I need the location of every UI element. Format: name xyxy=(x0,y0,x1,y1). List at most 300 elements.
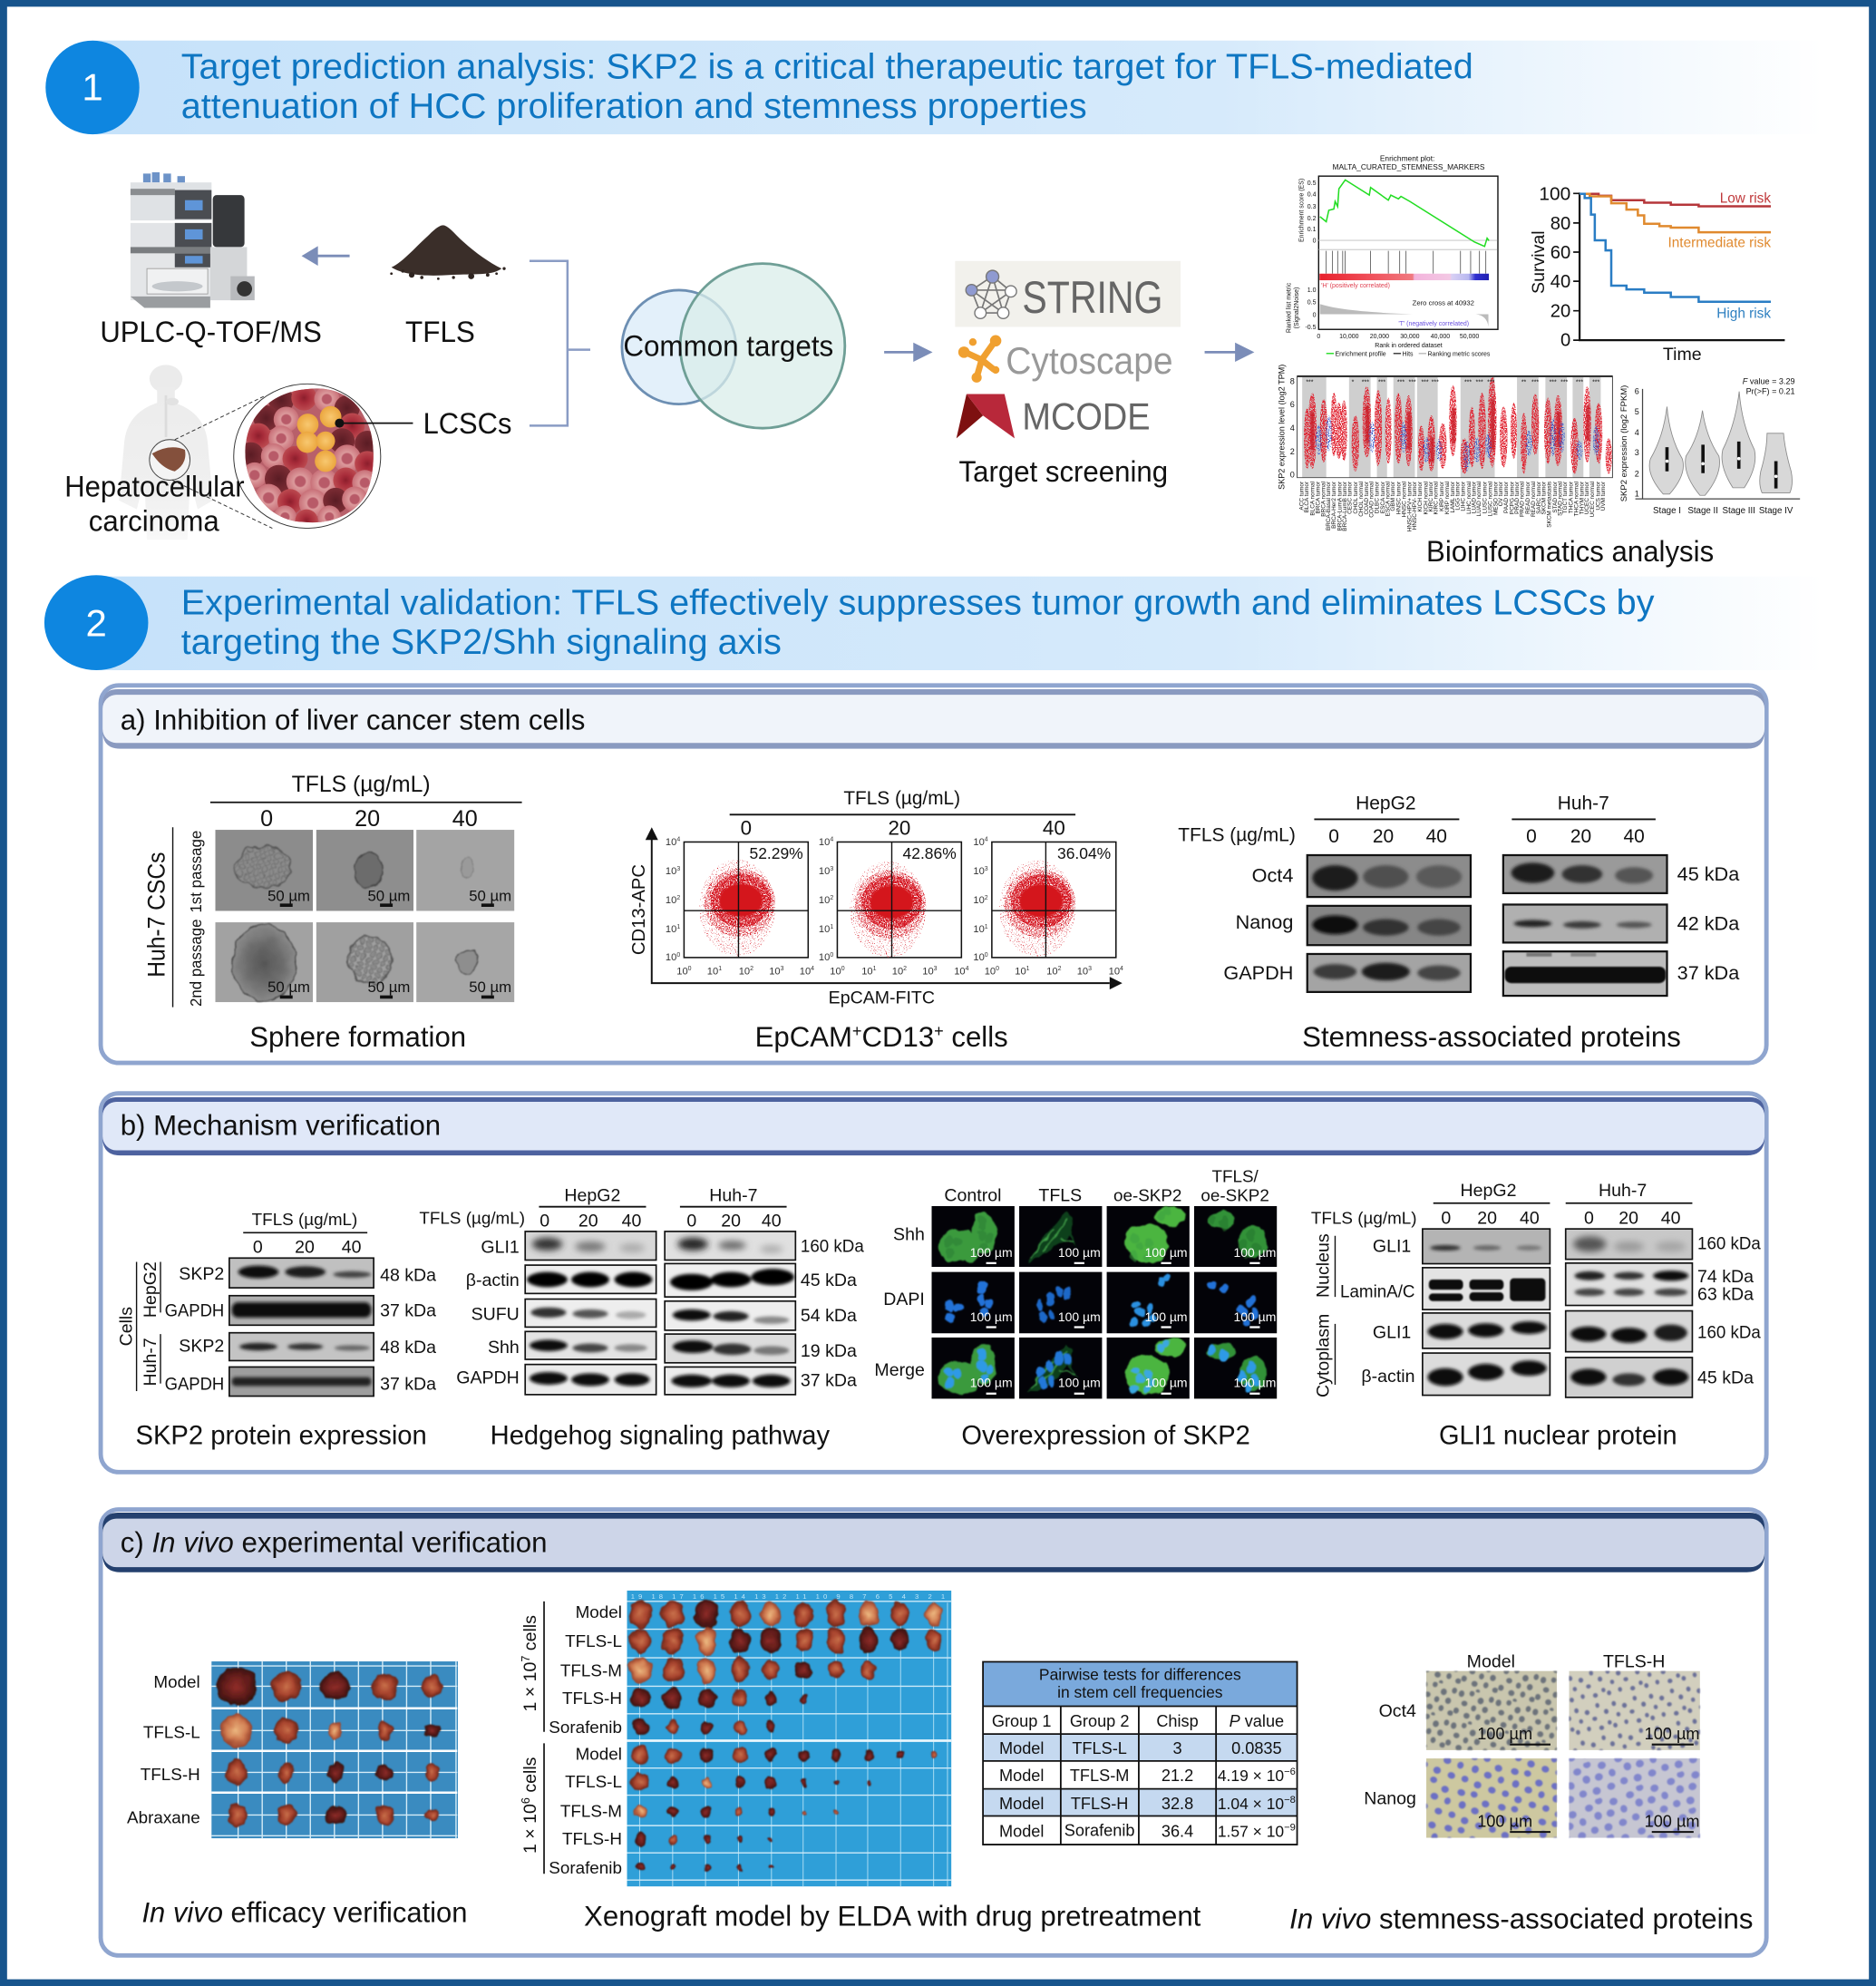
bracket connector xyxy=(530,261,590,425)
chart: TIMER SKP2 pan-cancer expression box plot: SKCM tumor xyxy=(1541,481,1547,515)
flow cytometry dot plots: 0 xyxy=(676,952,680,959)
table: pairwise tests for differences in stem cell frequencies: Model xyxy=(999,1767,1044,1785)
chart: GSEA enrichment plot: (Signal2Noise) xyxy=(1294,287,1300,328)
immunofluorescence micrographs: overexpression of SKP2: oe-SKP2 xyxy=(1200,1185,1269,1204)
immunofluorescence micrographs: overexpression of SKP2: 100 µm xyxy=(1145,1376,1188,1390)
table: pairwise tests for differences in stem cell frequencies: TFLS-H xyxy=(1071,1795,1128,1813)
flow cytometry dot plots: 3 xyxy=(781,966,784,972)
icon: TFLS powder pile xyxy=(390,225,506,280)
chart: TIMER SKP2 pan-cancer expression box plot: KIRC tumor xyxy=(1428,481,1434,511)
chart: GSEA enrichment plot: Zero cross at 40932 xyxy=(1413,299,1474,307)
chart: TIMER SKP2 pan-cancer expression box plot: *** xyxy=(1592,379,1599,385)
chart: TIMER SKP2 pan-cancer expression box plot: GBM tumor xyxy=(1390,481,1396,511)
chart: TIMER SKP2 pan-cancer expression box plot: SARC tumor xyxy=(1536,481,1542,514)
immunofluorescence micrographs: overexpression of SKP2: 100 µm xyxy=(970,1376,1013,1390)
table: pairwise tests for differences in stem cell frequencies: Model xyxy=(999,1795,1044,1813)
flow cytometry dot plots: 10 xyxy=(666,924,676,935)
chart: TIMER SKP2 pan-cancer expression box plot: *** xyxy=(1476,379,1483,385)
flow cytometry dot plots: 4 xyxy=(1120,966,1123,972)
chart: Kaplan-Meier survival curves: 60 xyxy=(1550,243,1570,263)
western blots: GLI1 nuclear protein: 160 kDa xyxy=(1697,1233,1761,1253)
chart: TIMER SKP2 pan-cancer expression box plot: CHOL tumor xyxy=(1353,481,1359,514)
logo: Cytoscape: Cytoscape xyxy=(1006,339,1173,382)
panel c header: c) In vivo experimental verification xyxy=(121,1526,548,1558)
flow cytometry dot plots: 10 xyxy=(985,966,996,977)
flow cytometry dot plots: 10 xyxy=(973,924,985,935)
chart: violin plot by tumor stage: 2 xyxy=(1635,469,1639,478)
table: pairwise tests for differences in stem cell frequencies: 3 xyxy=(1172,1739,1182,1757)
photo: xenograft tumors limiting dilution: TFLS-M xyxy=(560,1801,622,1820)
flow cytometry dot plots: TFLS (µg/mL) xyxy=(843,788,960,809)
western blots: stemness proteins: HepG2 xyxy=(1356,793,1416,814)
chart: TIMER SKP2 pan-cancer expression box plot: MESO tumor xyxy=(1492,481,1499,515)
chart: TIMER SKP2 pan-cancer expression box plot: PAAD tumor xyxy=(1503,481,1510,513)
flow cytometry dot plots: 2 xyxy=(985,895,988,901)
chart: TIMER SKP2 pan-cancer expression box plot: HNSC tumor xyxy=(1395,481,1402,514)
label: UPLC-Q-TOF/MS: UPLC-Q-TOF/MS xyxy=(100,316,322,348)
western blots: Hedgehog signaling pathway: 19 kDa xyxy=(801,1341,857,1361)
flow cytometry dot plots: 10 xyxy=(1109,966,1120,977)
chart: Kaplan-Meier survival curves: 40 xyxy=(1550,272,1570,292)
western blots: SKP2 protein expression xyxy=(116,1210,436,1397)
immunofluorescence micrographs: overexpression of SKP2: 100 µm xyxy=(1145,1309,1188,1324)
panel c: in vivo experimental verification xyxy=(101,1510,1766,1955)
chart: TIMER SKP2 pan-cancer expression box plot: UCEC normal xyxy=(1589,482,1596,517)
sphere formation micrographs: TFLS (µg/mL) xyxy=(292,773,431,797)
sphere formation micrographs: 50 µm xyxy=(469,978,511,996)
sphere formation micrographs: 50 µm xyxy=(267,887,310,904)
western blots: GLI1 nuclear protein: 63 kDa xyxy=(1697,1284,1754,1304)
chart: GSEA enrichment plot: 'T' (negatively correlated) xyxy=(1398,321,1469,327)
western blots: stemness proteins: 0 xyxy=(1328,826,1339,847)
chart: GSEA enrichment plot: 0.5 xyxy=(1307,299,1317,306)
flow cytometry dot plots: 10 xyxy=(1046,966,1058,977)
western blots: SKP2 protein expression: 20 xyxy=(295,1238,315,1258)
western blots: stemness proteins: 45 kDa xyxy=(1677,862,1740,885)
arrow: venn to target screening xyxy=(884,345,929,360)
western blots: stemness proteins: 20 xyxy=(1373,826,1394,847)
chart: TIMER SKP2 pan-cancer expression box plot: LAML tumor xyxy=(1450,481,1456,513)
sphere formation micrographs xyxy=(143,773,522,1008)
western blots: GLI1 nuclear protein: GLI1 xyxy=(1373,1322,1411,1342)
western blots: SKP2 protein expression: 0 xyxy=(253,1238,263,1258)
flow cytometry dot plots: 10 xyxy=(769,966,781,977)
chart: violin plot by tumor stage: Stage IV xyxy=(1759,506,1793,516)
chart: TIMER SKP2 pan-cancer expression box plot xyxy=(1278,365,1612,531)
chart: TIMER SKP2 pan-cancer expression box plot: ESCA tumor xyxy=(1380,481,1386,513)
chart: TIMER SKP2 pan-cancer expression box plot: ** xyxy=(1521,379,1527,385)
photo: xenograft tumors limiting dilution: 6 xyxy=(520,1797,532,1804)
chart: TIMER SKP2 pan-cancer expression box plot: 6 xyxy=(1290,400,1295,409)
chart: TIMER SKP2 pan-cancer expression box plot: ESCA normal xyxy=(1385,482,1392,516)
photo: excised tumors by treatment group: TFLS-H xyxy=(141,1765,200,1784)
immunofluorescence micrographs: overexpression of SKP2: 100 µm xyxy=(1145,1245,1188,1260)
photo: excised tumors by treatment group: TFLS-L xyxy=(143,1723,200,1742)
western blots: Hedgehog signaling pathway: 160 kDa xyxy=(801,1236,864,1256)
caption: EpCAM+CD13+ cells: EpCAM xyxy=(755,1021,852,1053)
photo: xenograft tumors limiting dilution: cells xyxy=(520,1757,540,1797)
immunofluorescence micrographs: overexpression of SKP2: Shh xyxy=(893,1225,925,1245)
chart: Kaplan-Meier survival curves: 80 xyxy=(1550,214,1570,234)
sphere formation micrographs: 1st passage xyxy=(187,831,205,913)
section 2 header xyxy=(44,575,1824,670)
western blots: SKP2 protein expression: TFLS (µg/mL) xyxy=(252,1210,357,1229)
chart: GSEA enrichment plot: 0.5 xyxy=(1307,180,1317,187)
photo: xenograft tumors limiting dilution: 19 18 17 16 15 14 13 12 11 10 9 8 7 6 5 4 3 2 1 xyxy=(631,1592,945,1601)
western blots: SKP2 protein expression: HepG2 xyxy=(141,1261,160,1318)
western blots: Hedgehog signaling pathway: Shh xyxy=(488,1338,520,1358)
chart: TIMER SKP2 pan-cancer expression box plot: BRCA normal xyxy=(1320,482,1327,517)
arrow: TFLS to UPLC xyxy=(304,248,350,264)
flow cytometry dot plots: 3 xyxy=(830,866,833,872)
icon: tumor cell cluster with cancer stem cells xyxy=(234,384,381,532)
flow cytometry dot plots: 10 xyxy=(973,866,985,877)
chart: TIMER SKP2 pan-cancer expression box plot: KICH normal xyxy=(1423,482,1429,515)
western blots: stemness proteins: 37 kDa xyxy=(1677,961,1740,984)
chart: TIMER SKP2 pan-cancer expression box plot: LIHC normal xyxy=(1466,482,1473,514)
chart: violin plot by tumor stage: 5 xyxy=(1635,407,1639,416)
caption: In vivo stemness-associated proteins: In vivo stemness-associated proteins xyxy=(1289,1903,1753,1934)
western blots: stemness proteins: 20 xyxy=(1570,826,1591,847)
section 1 header: attenuation of HCC proliferation and stemness properties xyxy=(181,87,1087,126)
flow cytometry dot plots: 10 xyxy=(922,966,934,977)
immunofluorescence micrographs: overexpression of SKP2: 100 µm xyxy=(1233,1309,1276,1324)
immunohistochemistry micrographs: Nanog xyxy=(1364,1788,1416,1808)
sphere formation micrographs: 2nd passage xyxy=(187,920,205,1007)
flow cytometry dot plots: 2 xyxy=(676,895,680,901)
western blots: GLI1 nuclear protein: 20 xyxy=(1477,1209,1497,1229)
western blots: Hedgehog signaling pathway: TFLS (µg/mL) xyxy=(419,1209,525,1228)
western blots: stemness proteins: Oct4 xyxy=(1252,863,1293,886)
western blots: GLI1 nuclear protein: 0 xyxy=(1584,1209,1594,1229)
flow cytometry dot plots xyxy=(629,788,1123,1008)
western blots: Hedgehog signaling pathway: HepG2 xyxy=(564,1185,620,1205)
callout: LCSCs pointer and label xyxy=(335,407,511,440)
western blots: GLI1 nuclear protein: 74 kDa xyxy=(1697,1267,1754,1287)
chart: TIMER SKP2 pan-cancer expression box plot: READ normal xyxy=(1531,482,1537,517)
chart: TIMER SKP2 pan-cancer expression box plot: *** xyxy=(1397,379,1405,385)
caption: Stemness-associated proteins: Stemness-associated proteins xyxy=(1302,1021,1681,1053)
flow cytometry dot plots: 52.29% xyxy=(750,844,803,862)
flow cytometry dot plots: 0 xyxy=(841,966,845,972)
panel c header xyxy=(102,1513,1764,1572)
immunohistochemistry micrographs: 100 µm xyxy=(1645,1813,1700,1831)
sphere formation micrographs: 40 xyxy=(452,806,478,832)
western blots: GLI1 nuclear protein: Cytoplasm xyxy=(1313,1314,1333,1397)
chart: GSEA enrichment plot: 20,000 xyxy=(1370,334,1389,340)
western blots: GLI1 nuclear protein: 160 kDa xyxy=(1697,1322,1761,1342)
photo: xenograft tumors limiting dilution: TFLS-L xyxy=(565,1631,622,1650)
chart: TIMER SKP2 pan-cancer expression box plot: *** xyxy=(1306,379,1314,385)
table: pairwise tests for differences in stem cell frequencies: 0.0835 xyxy=(1231,1739,1282,1757)
chart: TIMER SKP2 pan-cancer expression box plot: KICH tumor xyxy=(1417,481,1424,511)
immunofluorescence micrographs: overexpression of SKP2: 100 µm xyxy=(1233,1245,1276,1260)
sphere formation micrographs: 50 µm xyxy=(469,887,511,904)
chart: GSEA enrichment plot: 40,000 xyxy=(1431,334,1450,340)
chart: violin plot by tumor stage: Pr(>F) = 0.21 xyxy=(1746,386,1795,395)
table: pairwise tests for differences in stem cell frequencies: TFLS-M xyxy=(1070,1767,1129,1785)
icon: UPLC-Q-TOF/MS instrument xyxy=(131,172,255,307)
western blots: Hedgehog signaling pathway: GAPDH xyxy=(456,1368,520,1388)
immunofluorescence micrographs: overexpression of SKP2: 100 µm xyxy=(970,1245,1013,1260)
western blots: Hedgehog signaling pathway: 45 kDa xyxy=(801,1270,857,1290)
table: pairwise tests for differences in stem cell frequencies: TFLS-L xyxy=(1072,1739,1127,1757)
panel a header xyxy=(102,689,1764,749)
section 1 header xyxy=(45,41,1824,134)
western blots: SKP2 protein expression: 48 kDa xyxy=(380,1338,436,1358)
callout: LCSCs pointer and label: LCSCs xyxy=(423,407,511,440)
venn diagram: common targets: Common targets xyxy=(623,330,833,363)
flow cytometry dot plots: 10 xyxy=(892,966,903,977)
western blots: Hedgehog signaling pathway: Huh-7 xyxy=(709,1185,758,1205)
chart: TIMER SKP2 pan-cancer expression box plot: LGG tumor xyxy=(1454,481,1461,511)
photo: excised tumors by treatment group xyxy=(127,1661,458,1838)
chart: Kaplan-Meier survival curves: Low risk xyxy=(1720,191,1771,207)
flow cytometry dot plots: 1 xyxy=(718,966,722,972)
chart: TIMER SKP2 pan-cancer expression box plot: 4 xyxy=(1290,423,1295,433)
immunofluorescence micrographs: overexpression of SKP2: Merge xyxy=(874,1360,925,1380)
flow cytometry dot plots: 10 xyxy=(800,966,811,977)
flow cytometry dot plots: 10 xyxy=(739,966,750,977)
western blots: Hedgehog signaling pathway: 0 xyxy=(539,1211,549,1231)
chart: TIMER SKP2 pan-cancer expression box plot: BLCA tumor xyxy=(1304,481,1310,512)
panel b: mechanism verification xyxy=(101,1094,1766,1472)
chart: GSEA enrichment plot: 0 xyxy=(1313,312,1317,318)
caption: GLI1 nuclear protein: GLI1 nuclear protein xyxy=(1439,1421,1677,1451)
section 1 header: 1 xyxy=(82,65,103,108)
table: pairwise tests for differences in stem cell frequencies: in stem cell frequencies xyxy=(1057,1683,1223,1701)
chart: TIMER SKP2 pan-cancer expression box plot: DLBC tumor xyxy=(1375,481,1381,513)
flow cytometry dot plots: 1 xyxy=(985,924,988,930)
caption: EpCAM+CD13+ cells: CD13 xyxy=(862,1021,934,1053)
caption: EpCAM+CD13+ cells: + xyxy=(852,1022,862,1040)
chart: Kaplan-Meier survival curves: Time xyxy=(1663,345,1702,365)
chart: GSEA enrichment plot: MALTA_CURATED_STEMNESS_MARKERS xyxy=(1332,162,1485,171)
chart: GSEA enrichment plot: -0.5 xyxy=(1305,325,1317,331)
western blots: GLI1 nuclear protein: 40 xyxy=(1520,1209,1540,1229)
chart: TIMER SKP2 pan-cancer expression box plot: PCPG tumor xyxy=(1509,481,1515,514)
chart: TIMER SKP2 pan-cancer expression box plot: *** xyxy=(1378,379,1385,385)
chart: TIMER SKP2 pan-cancer expression box plot: SKP2 expression level (log2 TPM) xyxy=(1278,365,1287,490)
chart: violin plot by tumor stage: 3 xyxy=(1635,448,1639,457)
chart: TIMER SKP2 pan-cancer expression box plot: 0 xyxy=(1290,471,1295,480)
western blots: SKP2 protein expression: Huh-7 xyxy=(141,1338,160,1386)
flow cytometry dot plots: 4 xyxy=(830,837,833,843)
chart: GSEA enrichment plot: 'H' (positively correlated) xyxy=(1321,283,1390,289)
chart: TIMER SKP2 pan-cancer expression box plot: BRCA-LumB tumor xyxy=(1342,481,1348,531)
chart: Kaplan-Meier survival curves: 100 xyxy=(1539,185,1570,205)
chart: TIMER SKP2 pan-cancer expression box plot: BRCA-Her2 tumor xyxy=(1331,481,1337,529)
western blots: stemness proteins: Nanog xyxy=(1236,910,1293,933)
immunofluorescence micrographs: overexpression of SKP2: 100 µm xyxy=(1058,1309,1101,1324)
chart: TIMER SKP2 pan-cancer expression box plot: COAD normal xyxy=(1368,482,1375,518)
chart: GSEA enrichment plot: Rank in ordered dataset xyxy=(1375,343,1443,349)
chart: violin plot by tumor stage: F value = 3.29 xyxy=(1743,376,1795,385)
chart: GSEA enrichment plot: 30,000 xyxy=(1400,334,1420,340)
caption: SKP2 protein expression: SKP2 protein expression xyxy=(135,1421,427,1451)
immunofluorescence micrographs: overexpression of SKP2: oe-SKP2 xyxy=(1113,1185,1181,1204)
chart: TIMER SKP2 pan-cancer expression box plot: *** xyxy=(1362,379,1369,385)
flow cytometry dot plots: 3 xyxy=(985,866,988,872)
table: pairwise tests for differences in stem cell frequencies: Sorafenib xyxy=(1064,1821,1134,1839)
flow cytometry dot plots: 3 xyxy=(1088,966,1092,972)
chart: Kaplan-Meier survival curves: 20 xyxy=(1550,301,1570,321)
flow cytometry dot plots: 10 xyxy=(676,966,688,977)
western blots: Hedgehog signaling pathway: β-actin xyxy=(466,1270,520,1290)
photo: xenograft tumors limiting dilution: Sorafenib xyxy=(549,1858,622,1877)
chart: TIMER SKP2 pan-cancer expression box plot: UCEC tumor xyxy=(1584,481,1590,514)
logo: MCODE xyxy=(957,394,1151,438)
table: pairwise tests for differences in stem cell frequencies: Group 2 xyxy=(1070,1712,1129,1730)
western blots: SKP2 protein expression: 37 kDa xyxy=(380,1301,436,1321)
immunofluorescence micrographs: overexpression of SKP2: Control xyxy=(944,1185,1001,1205)
western blots: SKP2 protein expression: Cells xyxy=(116,1307,136,1346)
western blots: GLI1 nuclear protein: LaminA/C xyxy=(1340,1282,1414,1302)
chart: TIMER SKP2 pan-cancer expression box plot: KIRP normal xyxy=(1444,482,1451,514)
chart: Kaplan-Meier survival curves: 0 xyxy=(1560,330,1570,350)
section 2 header: targeting the SKP2/Shh signaling axis xyxy=(181,623,782,662)
table: pairwise tests for differences in stem cell frequencies: P value xyxy=(1230,1712,1284,1730)
flow cytometry dot plots: 2 xyxy=(750,966,753,972)
photo: xenograft tumors limiting dilution: 1 × 10 xyxy=(520,1804,540,1854)
table: pairwise tests for differences in stem cell frequencies: −9 xyxy=(1284,1823,1296,1834)
photo: xenograft tumors limiting dilution: 7 xyxy=(520,1656,532,1662)
chart: TIMER SKP2 pan-cancer expression box plot: HNSC normal xyxy=(1402,482,1408,517)
western blots: stemness proteins: Huh-7 xyxy=(1558,793,1609,814)
chart: GSEA enrichment plot: 0 xyxy=(1313,239,1317,245)
chart: TIMER SKP2 pan-cancer expression box plot: PRAD normal xyxy=(1520,482,1526,517)
western blots: Hedgehog signaling pathway: 40 xyxy=(762,1211,782,1231)
western blots: Hedgehog signaling pathway xyxy=(419,1185,864,1395)
photo: xenograft tumors limiting dilution: cells xyxy=(520,1615,540,1656)
chart: TIMER SKP2 pan-cancer expression box plot: *** xyxy=(1560,379,1569,385)
western blots: stemness proteins: 0 xyxy=(1526,826,1537,847)
immunofluorescence micrographs: overexpression of SKP2: 100 µm xyxy=(970,1309,1013,1324)
photo: xenograft tumors limiting dilution: TFLS-M xyxy=(560,1660,622,1679)
label: TFLS: TFLS xyxy=(405,316,475,348)
flow cytometry dot plots: 10 xyxy=(973,895,985,906)
chart: TIMER SKP2 pan-cancer expression box plot: STAD tumor xyxy=(1552,481,1559,513)
caption: EpCAM+CD13+ cells: + xyxy=(934,1022,944,1040)
chart: GSEA enrichment plot: Enrichment profile xyxy=(1335,352,1386,358)
chart: violin plot by tumor stage: SKP2 expression (log2 FPKM) xyxy=(1619,385,1629,501)
western blots: SKP2 protein expression: GAPDH xyxy=(165,1375,224,1395)
photo: excised tumors by treatment group: Abraxane xyxy=(127,1807,200,1826)
chart: TIMER SKP2 pan-cancer expression box plot: LIHC tumor xyxy=(1461,481,1467,511)
flow cytometry dot plots: 36.04% xyxy=(1057,844,1111,862)
section 2 header: 2 xyxy=(86,601,107,644)
chart: TIMER SKP2 pan-cancer expression box plot: HNSC-HPV- tumor xyxy=(1412,481,1418,530)
flow cytometry dot plots: 2 xyxy=(830,895,833,901)
western blots: GLI1 nuclear protein: HepG2 xyxy=(1461,1181,1516,1201)
western blots: GLI1 nuclear protein: β-actin xyxy=(1361,1367,1414,1387)
panel a header: a) Inhibition of liver cancer stem cells xyxy=(121,705,585,736)
western blots: stemness proteins: 40 xyxy=(1624,826,1645,847)
immunohistochemistry micrographs: Model xyxy=(1467,1651,1515,1671)
western blots: GLI1 nuclear protein: Huh-7 xyxy=(1599,1181,1647,1201)
flow cytometry dot plots: 1 xyxy=(1026,966,1030,972)
flow cytometry dot plots: 10 xyxy=(1015,966,1026,977)
chart: GSEA enrichment plot: Ranking metric scores xyxy=(1427,352,1491,358)
table: pairwise tests for differences in stem cell frequencies: 32.8 xyxy=(1162,1795,1193,1813)
sphere formation micrographs: 50 µm xyxy=(367,887,410,904)
chart: TIMER SKP2 pan-cancer expression box plot: *** xyxy=(1531,379,1539,385)
western blots: stemness proteins: 40 xyxy=(1426,826,1447,847)
flow cytometry dot plots: 10 xyxy=(819,837,830,848)
flow cytometry dot plots: 10 xyxy=(973,837,985,848)
chart: violin plot by tumor stage xyxy=(1619,376,1800,516)
chart: GSEA enrichment plot: Hits xyxy=(1403,352,1414,358)
chart: TIMER SKP2 pan-cancer expression box plot: *** xyxy=(1432,379,1439,385)
western blots: Hedgehog signaling pathway: GLI1 xyxy=(481,1238,520,1258)
panel b header: b) Mechanism verification xyxy=(121,1110,441,1142)
chart: TIMER SKP2 pan-cancer expression box plot: HNSC-HPV+ tumor xyxy=(1406,481,1413,531)
chart: TIMER SKP2 pan-cancer expression box plot: *** xyxy=(1408,379,1416,385)
western blots: Hedgehog signaling pathway: 0 xyxy=(686,1211,696,1231)
western blots: GLI1 nuclear protein: 20 xyxy=(1618,1209,1638,1229)
panel a: inhibition of liver cancer stem cells xyxy=(101,686,1766,1063)
caption: Hedgehog signaling pathway: Hedgehog signaling pathway xyxy=(491,1421,830,1451)
flow cytometry dot plots: 10 xyxy=(819,866,830,877)
chart: TIMER SKP2 pan-cancer expression box plot: LUSC normal xyxy=(1488,482,1494,516)
western blots: GLI1 nuclear protein: 45 kDa xyxy=(1697,1368,1754,1388)
table: pairwise tests for differences in stem cell frequencies: 21.2 xyxy=(1162,1767,1193,1785)
chart: violin plot by tumor stage: 6 xyxy=(1635,386,1639,395)
chart: TIMER SKP2 pan-cancer expression box plot: KIRP tumor xyxy=(1439,481,1445,511)
chart: Kaplan-Meier survival curves xyxy=(1529,185,1784,365)
chart: GSEA enrichment plot: 0.3 xyxy=(1307,204,1317,210)
western blots: GLI1 nuclear protein: TFLS (µg/mL) xyxy=(1311,1209,1417,1228)
chart: TIMER SKP2 pan-cancer expression box plot: *** xyxy=(1487,379,1495,385)
western blots: GLI1 nuclear protein: GLI1 xyxy=(1373,1236,1411,1256)
flow cytometry dot plots: 4 xyxy=(811,966,814,972)
flow cytometry dot plots: 10 xyxy=(666,952,676,963)
immunofluorescence micrographs: overexpression of SKP2: TFLS/ xyxy=(1211,1166,1259,1185)
immunofluorescence micrographs: overexpression of SKP2 xyxy=(874,1166,1277,1398)
flow cytometry dot plots: 10 xyxy=(973,952,985,963)
flow cytometry dot plots: 10 xyxy=(830,966,841,977)
flow cytometry dot plots: 10 xyxy=(707,966,718,977)
chart: TIMER SKP2 pan-cancer expression box plot: KIRC normal xyxy=(1434,482,1440,515)
photo: xenograft tumors limiting dilution xyxy=(520,1591,951,1886)
photo: xenograft tumors limiting dilution: 1 × 10 xyxy=(520,1662,540,1712)
logo: MCODE: MCODE xyxy=(1022,395,1151,438)
flow cytometry dot plots: 0 xyxy=(741,817,752,840)
flow cytometry dot plots: CD13-APC xyxy=(629,864,649,955)
western blots: SKP2 protein expression: 48 kDa xyxy=(380,1265,436,1285)
flow cytometry dot plots: 2 xyxy=(903,966,907,972)
sphere formation micrographs: 0 xyxy=(260,806,273,832)
chart: TIMER SKP2 pan-cancer expression box plot: *** xyxy=(1550,379,1557,385)
immunofluorescence micrographs: overexpression of SKP2: TFLS xyxy=(1038,1185,1082,1205)
flow cytometry dot plots: 10 xyxy=(666,895,676,906)
flow cytometry dot plots: 10 xyxy=(861,966,873,977)
chart: violin plot by tumor stage: Stage II xyxy=(1687,506,1718,516)
chart: TIMER SKP2 pan-cancer expression box plot: OV tumor xyxy=(1498,481,1504,506)
western blots: Hedgehog signaling pathway: SUFU xyxy=(471,1305,520,1325)
chart: violin plot by tumor stage: 1 xyxy=(1635,490,1639,499)
label: Hepatocellular carcinoma: Hepatocellular xyxy=(64,471,245,503)
chart: TIMER SKP2 pan-cancer expression box plot: SKCM metastasis xyxy=(1547,482,1553,528)
western blots: GLI1 nuclear protein: Nucleus xyxy=(1313,1233,1333,1298)
caption: Sphere formation: Sphere formation xyxy=(249,1021,466,1053)
table: pairwise tests for differences in stem cell frequencies: Group 1 xyxy=(992,1712,1052,1730)
photo: xenograft tumors limiting dilution: Sorafenib xyxy=(549,1718,622,1737)
western blots: SKP2 protein expression: 37 kDa xyxy=(380,1375,436,1395)
flow cytometry dot plots: 10 xyxy=(1077,966,1088,977)
logo: STRING: STRING xyxy=(1022,271,1162,323)
flow cytometry dot plots: 0 xyxy=(996,966,999,972)
